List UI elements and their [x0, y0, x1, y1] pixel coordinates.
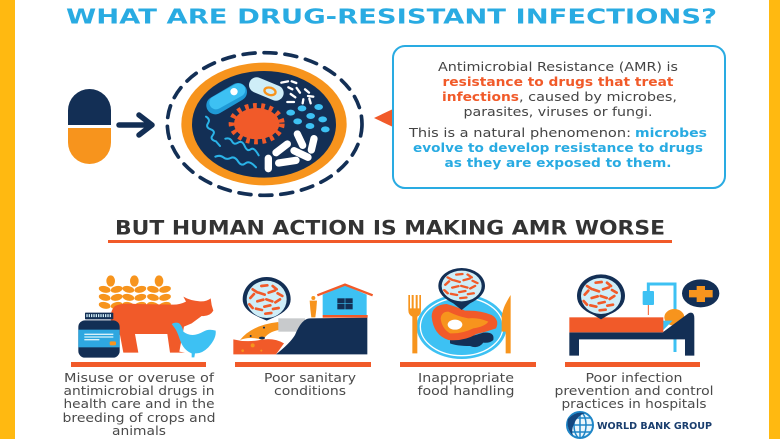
caption: Poor sanitary [264, 371, 356, 385]
caption [418, 371, 514, 398]
dashed outline [167, 53, 362, 195]
caption: antimicrobial drugs in [64, 384, 214, 398]
virus [232, 106, 281, 141]
subheading rule [108, 240, 672, 243]
meat [432, 304, 497, 340]
blue cocci [286, 104, 330, 132]
icon: plate of meat [408, 268, 511, 359]
mattress [569, 317, 663, 332]
caption: Misuse or overuse of [64, 371, 215, 385]
IV tube [647, 305, 650, 315]
bar [71, 362, 206, 367]
small white rods [281, 81, 313, 103]
cow [111, 297, 213, 353]
microbe bubble [577, 274, 625, 319]
IV bag [643, 291, 654, 305]
caption: breeding of crops and [62, 411, 216, 425]
hill [276, 318, 367, 354]
panel: misuse of drugs [62, 275, 216, 438]
panel: inappropriate food handling [400, 268, 536, 398]
bed frame [569, 313, 694, 356]
medical cross [682, 279, 719, 307]
definition text: as they are exposed to them. [444, 155, 672, 170]
illustration: microbes in petri dish [167, 53, 362, 195]
person [310, 296, 317, 317]
IV stand [648, 284, 675, 352]
panel: poor infection control in hospitals [554, 274, 719, 411]
logo: World Bank Group [567, 412, 712, 438]
pillow [663, 321, 673, 331]
caption: Inappropriate [418, 371, 514, 385]
icon: globe [567, 412, 593, 438]
shadow [450, 333, 494, 347]
drain pipe [278, 318, 305, 332]
caption: Poor infection [586, 371, 682, 385]
contaminated water [233, 339, 284, 354]
microbe bubble [243, 277, 291, 321]
caption [264, 371, 356, 398]
definition text: This is a natural phenomenon: [408, 125, 631, 140]
logo wordmark: WORLD BANK GROUP [597, 421, 712, 432]
callout pointer [374, 109, 393, 127]
patient head [664, 309, 684, 326]
plate [417, 294, 507, 359]
caption [62, 371, 216, 438]
title: WHAT ARE DRUG-RESISTANT INFECTIONS? [66, 4, 717, 28]
sewage stream [240, 322, 279, 340]
spirilla [206, 117, 259, 167]
orange dish rim [181, 63, 347, 185]
icon: hospital bed [569, 274, 719, 356]
definition text: microbes [635, 125, 707, 140]
icon: capsule [68, 89, 111, 164]
arrow: capsule to microbes [119, 115, 152, 135]
panel: AMR definition [393, 46, 725, 188]
definition text: parasites, viruses or fungi. [464, 104, 652, 119]
large white rods [268, 134, 314, 169]
hen [172, 323, 216, 357]
bar [235, 362, 371, 367]
microbe bubble [438, 268, 485, 310]
caption: food handling [418, 384, 514, 398]
caption: practices in hospitals [562, 397, 706, 411]
knife [502, 295, 511, 353]
caption [554, 371, 714, 411]
pale bacterium [257, 85, 276, 96]
panel: poor sanitary conditions [233, 277, 373, 398]
definition text: , caused by microbes, [519, 89, 677, 104]
caption: conditions [274, 384, 346, 398]
definition text: resistance to drugs that treat [442, 74, 674, 89]
left yellow border [0, 0, 15, 439]
wheat [98, 275, 172, 310]
caption: animals [112, 424, 166, 438]
icon: crops, cow, hen, medicine [78, 275, 216, 358]
bar [400, 362, 536, 367]
medicine jar [78, 313, 120, 358]
icon: sewage and house [233, 277, 373, 354]
right yellow border [769, 0, 780, 439]
house [317, 285, 373, 318]
caption: health care and in the [64, 397, 214, 411]
fork [408, 295, 421, 353]
subheading: BUT HUMAN ACTION IS MAKING AMR WORSE [115, 216, 665, 240]
definition text: infections [442, 89, 519, 104]
definition text: evolve to develop resistance to drugs [413, 140, 703, 155]
definition text [408, 59, 707, 170]
dark dish interior [192, 71, 336, 178]
caption: prevention and control [554, 384, 714, 398]
bar [565, 362, 700, 367]
definition text: Antimicrobial Resistance (AMR) is [438, 59, 678, 74]
stream specks [250, 327, 265, 339]
water specks [241, 343, 262, 352]
blue bacterium [215, 88, 239, 105]
